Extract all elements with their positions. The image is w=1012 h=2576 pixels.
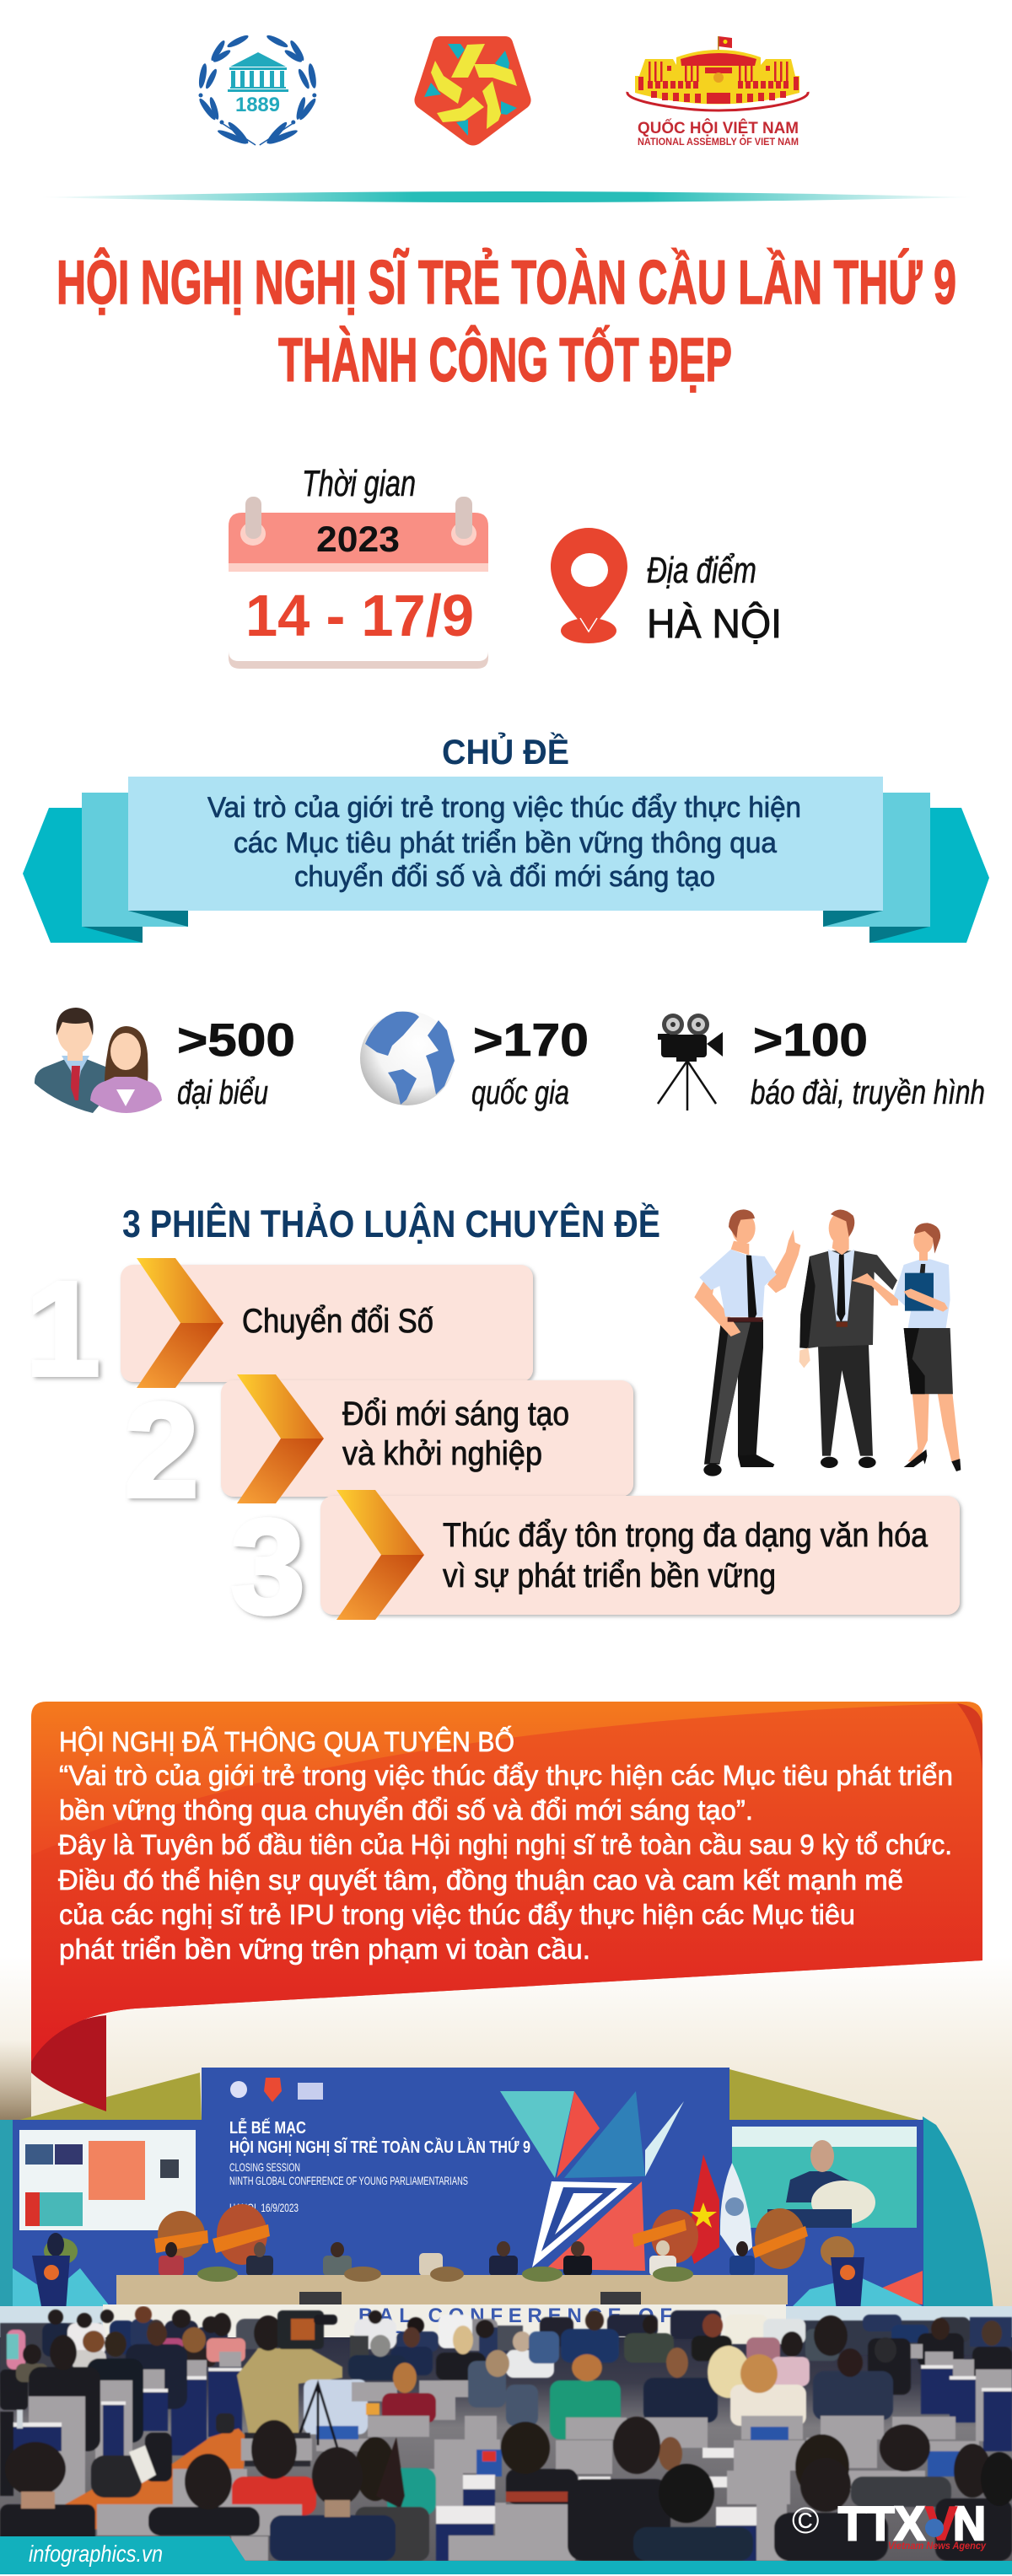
man 1 [694, 1209, 800, 1476]
stat: delegates: đại biểu [177, 1074, 268, 1111]
floor banner: PAR [367, 2327, 405, 2348]
logo: TTXVN: V [925, 2497, 957, 2551]
heading: CHỦ ĐỀ: CHỦ ĐỀ [442, 731, 569, 772]
logo: conference pentagon emblem [414, 36, 531, 145]
camera operator [237, 2310, 369, 2434]
theme text: chuyển đổi số và đổi mới sáng tạo [294, 861, 715, 893]
icon: location pin [551, 528, 627, 643]
session 2 text: Đổi mới sáng tạo [342, 1396, 569, 1433]
session 2 [124, 1374, 633, 1525]
stat: media: >100 [753, 1014, 868, 1066]
backdrop text: CLOSING SESSION [229, 2160, 300, 2174]
session 3 [230, 1490, 960, 1642]
logo: TTXVN: © [792, 2500, 819, 2541]
stat: delegates: >500 [177, 1014, 295, 1066]
stat: delegates [35, 1008, 295, 1113]
chevron 1 [137, 1258, 223, 1388]
declaration text: phát triển bền vững trên phạm vi toàn cầu. [59, 1933, 590, 1965]
ribbon body [31, 1702, 982, 2062]
session 3: 3 [230, 1491, 305, 1642]
logo: National Assembly of Viet Nam: NATIONAL ASSEMBLY OF VIET NAM [638, 137, 799, 148]
title [57, 249, 956, 395]
declaration text: HỘI NGHỊ ĐÃ THÔNG QUA TUYÊN BỐ [59, 1725, 514, 1757]
icon: globe [360, 1011, 455, 1105]
logo: TTXVN [792, 2497, 987, 2552]
backdrop text: LỄ BẾ MẠC [229, 2118, 306, 2138]
logo: IPU 1889: 1889 [235, 94, 280, 116]
heading: 3 discussion sessions: 3 PHIÊN THẢO LUẬN CHUYÊN ĐỀ [122, 1202, 660, 1245]
session 1: Chuyển đổi Số [242, 1303, 433, 1340]
calendar: 14-17/9 2023: 2023 [316, 519, 400, 560]
flower arrangements [44, 2204, 854, 2269]
logo: TTXVN: Vietnam News Agency [888, 2540, 987, 2552]
photo: closing session of the conference [0, 1956, 1012, 2563]
footer: infographics.vn: infographics.vn [29, 2541, 163, 2567]
floor banner [0, 2304, 1012, 2348]
theme text: các Mục tiêu phát triển bền vững thông qua [234, 827, 777, 859]
row 4 centre [241, 2326, 538, 2477]
floor banner: BAL CONFERENCE OF [358, 2304, 672, 2327]
row 2 [0, 2310, 1012, 2423]
panel: theme ribbon [23, 777, 989, 943]
right screen [732, 2127, 917, 2228]
label: Thời gian: Thời gian [302, 463, 416, 504]
declaration text: bền vững thông qua chuyển đổi số và đổi mới sáng tạo”. [59, 1794, 753, 1826]
session 3 text [443, 1517, 929, 1595]
carpet [65, 2428, 246, 2530]
session 1: 1 [25, 1253, 100, 1404]
calendar: 14-17/9 2023: 14 - 17/9 [245, 583, 474, 648]
backdrop graphic [500, 2091, 684, 2271]
session 2: 2 [124, 1374, 199, 1525]
theme text [207, 792, 801, 893]
footer: infographics.vn [0, 2536, 1012, 2574]
logo: IPU 1889 [197, 33, 318, 146]
stat: countries [360, 1011, 589, 1111]
theme text: Vai trò của giới trẻ trong việc thúc đẩy thực hiện [207, 792, 801, 824]
title: THÀNH CÔNG TỐT ĐẸP [278, 325, 732, 395]
panel: conference declaration [31, 1702, 982, 2111]
logo: National Assembly of Viet Nam: QUỐC HỘI VIỆT NAM [638, 119, 799, 137]
calendar: 14-17/9 2023 [229, 497, 488, 669]
laurel left [197, 33, 256, 146]
left screen [19, 2130, 196, 2230]
declaration text: “Vai trò của giới trẻ trong việc thúc đẩy thực hiện các Mục tiêu phát triển [59, 1760, 953, 1791]
laurel right [260, 33, 318, 146]
location text: Địa điểm [647, 550, 756, 591]
icon: film camera [658, 1014, 723, 1111]
woman [894, 1223, 961, 1471]
backdrop text: HANOI, 16/9/2023 [229, 2201, 299, 2214]
session 2 text [342, 1396, 569, 1472]
row 5 right [550, 2331, 1012, 2477]
bags [91, 2413, 234, 2498]
row 3 left [0, 2322, 242, 2504]
chevron 2 [237, 1374, 324, 1503]
session 1 [25, 1253, 533, 1404]
logo: TTXVN: TTX [838, 2497, 925, 2551]
logo: National Assembly of Viet Nam [627, 36, 808, 148]
location text [647, 550, 782, 647]
head table [116, 2240, 788, 2307]
front row [0, 2417, 1012, 2561]
ribbon fold [31, 2015, 106, 2111]
back rows [0, 2306, 1012, 2378]
logo: TTXVN: N [953, 2497, 986, 2551]
man 2 [799, 1210, 898, 1468]
session 3 text: Thúc đẩy tôn trọng đa dạng văn hóa [443, 1517, 929, 1554]
podiums [32, 2233, 864, 2311]
icon: delegates [35, 1008, 162, 1113]
audience floor base [0, 2337, 1012, 2563]
backdrop text: NINTH GLOBAL CONFERENCE OF YOUNG PARLIAMENTARIANS [229, 2174, 468, 2187]
hall wall [0, 1956, 1012, 2310]
declaration text: của các nghị sĩ trẻ IPU trong việc thúc đẩy thực hiện các Mục tiêu [59, 1899, 855, 1930]
declaration text [58, 1725, 953, 1965]
backdrop text: HỘI NGHỊ NGHỊ SĨ TRẺ TOÀN CẦU LẦN THỨ 9 [229, 2137, 530, 2157]
flags [687, 2154, 752, 2264]
backdrop logos [230, 2078, 323, 2102]
location text: HÀ NỘI [647, 601, 782, 647]
temple [228, 52, 288, 92]
declaration text: Đây là Tuyên bố đầu tiên của Hội nghị nghị sĩ trẻ toàn cầu sau 9 kỳ tổ chức. [58, 1829, 952, 1860]
chevron 3 [336, 1490, 424, 1620]
illustration: three professionals [694, 1209, 961, 1476]
declaration text: Điều đó thể hiện sự quyết tâm, đồng thuận cao và cam kết mạnh mẽ [58, 1864, 903, 1896]
session 3 text: vì sự phát triển bền vững [443, 1557, 776, 1595]
stat: media [658, 1014, 985, 1111]
audience [0, 2306, 1012, 2561]
stage backdrop [0, 2068, 993, 2310]
stat: countries: >170 [473, 1014, 589, 1066]
backdrop text [229, 2118, 530, 2214]
stat: countries: quốc gia [471, 1074, 569, 1111]
session 2 text: và khởi nghiệp [342, 1435, 542, 1472]
